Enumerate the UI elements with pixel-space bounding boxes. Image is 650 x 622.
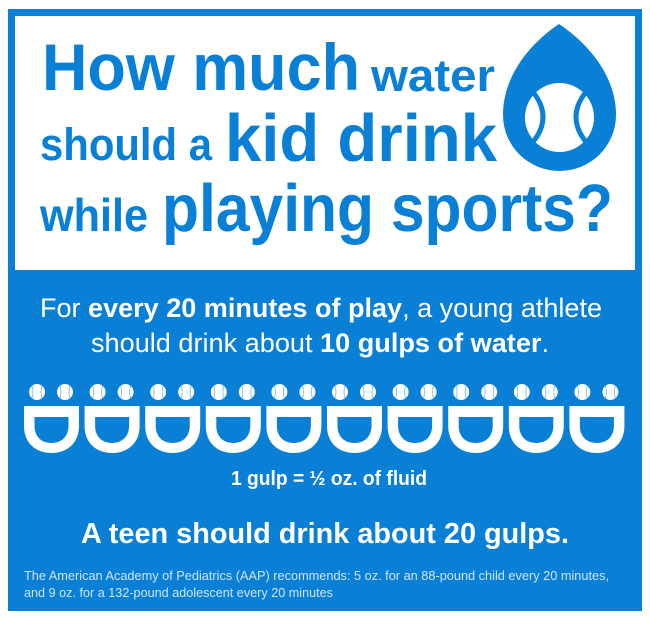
- intro text: should drink about 10 gulps of water.: [91, 328, 549, 358]
- gulp definition: 1 gulp = ½ oz. of fluid: [231, 468, 427, 490]
- title: [39, 30, 613, 246]
- title: while: [39, 189, 148, 241]
- icon: water drop with ball: [503, 24, 616, 171]
- title: water: [370, 50, 495, 101]
- footnote: The American Academy of Pediatrics (AAP) recommends: 5 oz. for an 88-pound child every 20 minutes,: [24, 569, 609, 583]
- title: kid drink: [225, 101, 498, 176]
- teen recommendation: A teen should drink about 20 gulps.: [81, 518, 569, 550]
- footnote: and 9 oz. for a 132-pound adolescent every 20 minutes: [24, 586, 333, 600]
- title: How much: [42, 30, 360, 104]
- header panel: [15, 16, 635, 270]
- title: should a: [40, 119, 213, 170]
- gulp icons: ten mouths and twenty balls: [24, 384, 624, 453]
- title: playing sports?: [162, 171, 613, 246]
- footnote: [24, 569, 609, 600]
- intro text: [40, 293, 602, 358]
- intro text: For every 20 minutes of play, a young athlete: [40, 293, 602, 323]
